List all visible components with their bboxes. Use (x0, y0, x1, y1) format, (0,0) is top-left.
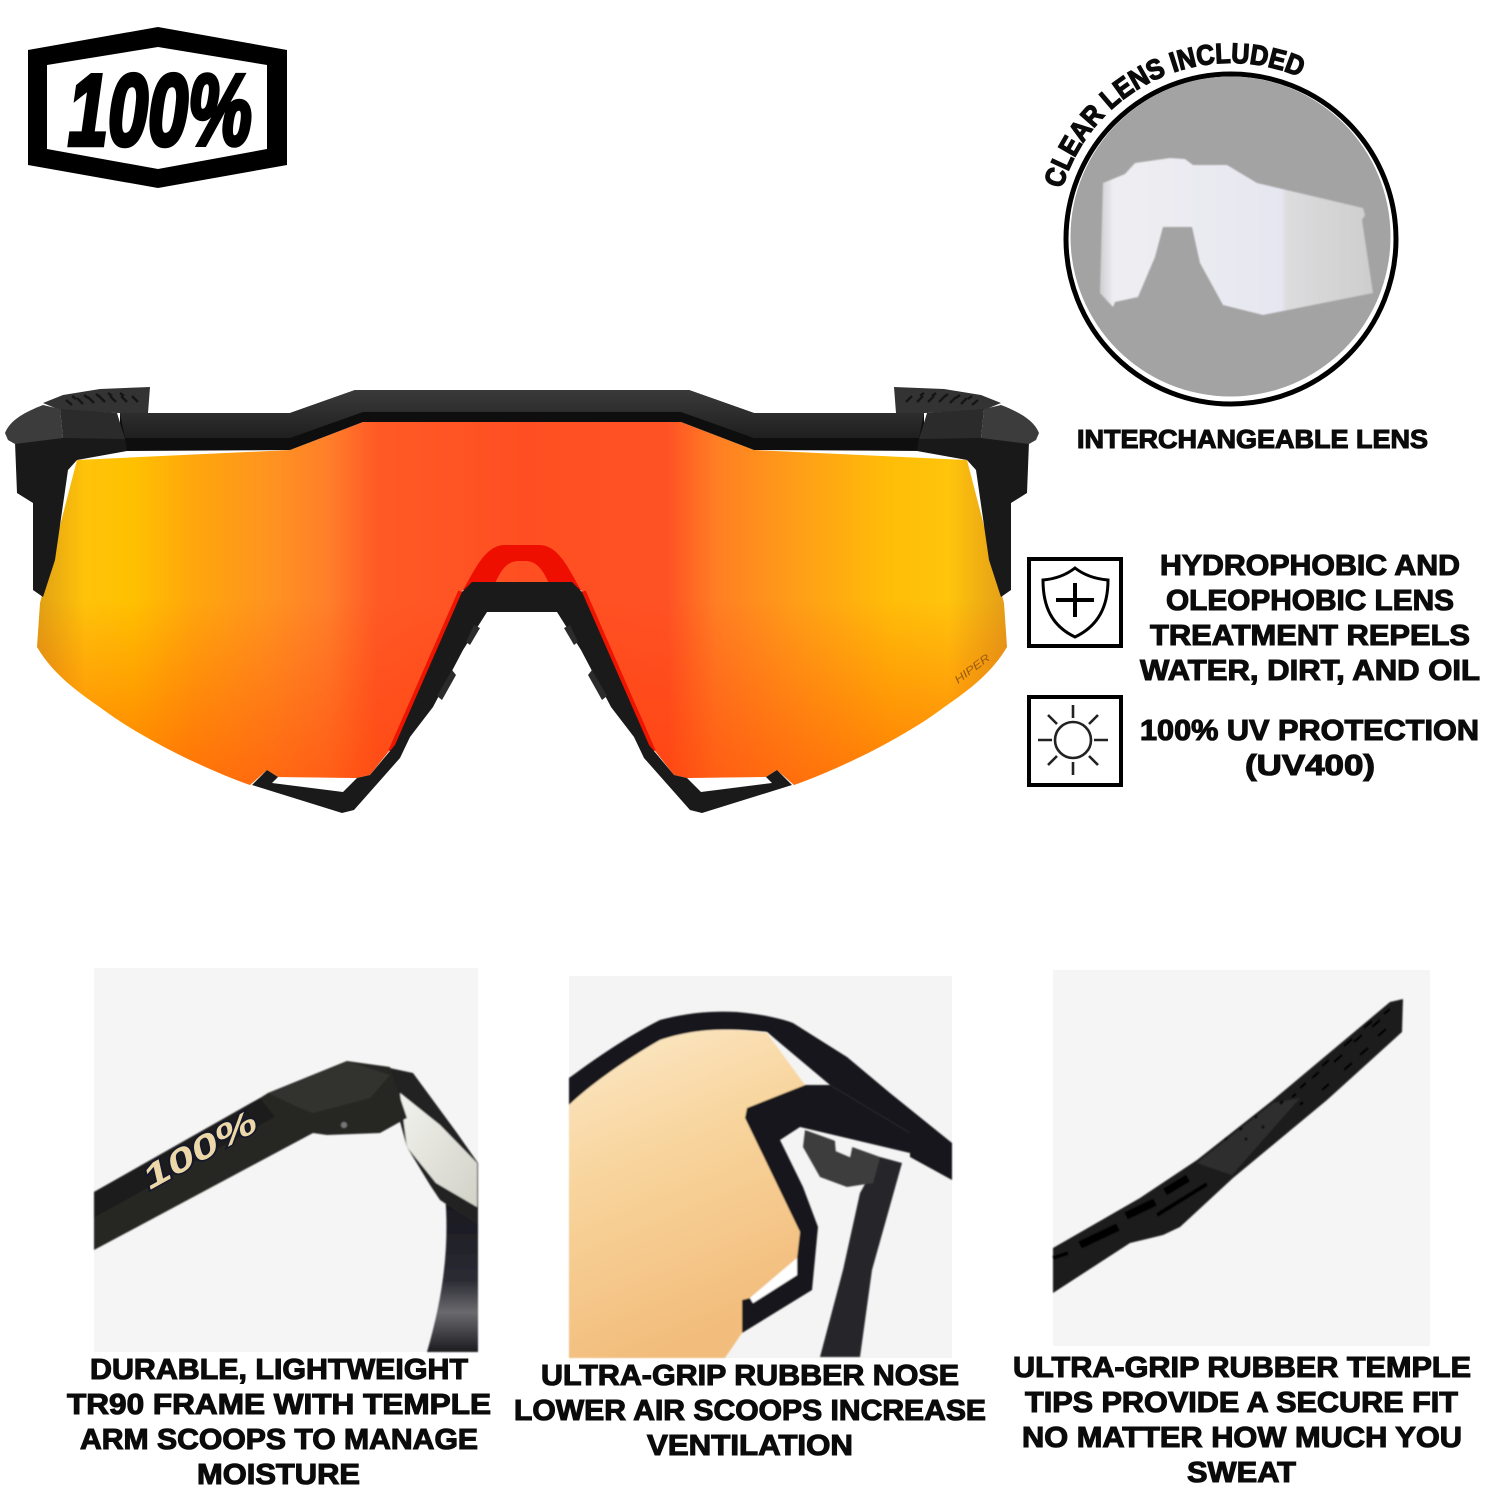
clear lens shape (1100, 158, 1373, 315)
text: lens treatment: TREATMENT REPELS (1150, 620, 1470, 652)
icon: shield with plus (1029, 559, 1121, 646)
temple arm (820, 1157, 902, 1357)
circle: clear lens included: CLEAR LENS INCLUDED (1045, 42, 1304, 186)
caption: nose: LOWER AIR SCOOPS INCREASE (514, 1395, 986, 1427)
caption: temple tips: SWEAT (1187, 1457, 1296, 1489)
logo on arm: 100% (135, 1103, 264, 1196)
frame: top bar and temples (5, 387, 1039, 597)
temple tip (1053, 999, 1403, 1293)
caption: nose: ULTRA-GRIP RUBBER NOSE (541, 1360, 959, 1392)
frame: nose piece and lower scoops (252, 582, 792, 813)
lens mark: HIPER: HIPER (953, 652, 993, 686)
text: lens treatment (1140, 550, 1480, 687)
frame nose strip (742, 1085, 910, 1333)
text: UV protection: 100% UV PROTECTION (1140, 715, 1479, 747)
text: lens treatment: WATER, DIRT, AND OIL (1140, 655, 1480, 687)
upper temple dark band (385, 1067, 478, 1225)
lower scoop (750, 1258, 797, 1303)
logo: 100% badge (28, 27, 287, 188)
frame top (569, 1012, 952, 1180)
arm (94, 1061, 407, 1250)
slots (1053, 1178, 1207, 1258)
grip plate (1197, 1098, 1300, 1175)
caption: temple tips (1013, 1352, 1471, 1489)
caption: frame (67, 1354, 491, 1491)
photo panel: temple tip closeup (1053, 970, 1430, 1346)
caption: frame: DURABLE, LIGHTWEIGHT (90, 1354, 468, 1386)
lens: mirrored orange (37, 422, 1007, 785)
caption: frame: ARM SCOOPS TO MANAGE (80, 1424, 478, 1456)
curved label (1062, 63, 1300, 189)
caption: nose (514, 1360, 986, 1462)
gold lens (569, 1030, 805, 1358)
caption: temple tips: TIPS PROVIDE A SECURE FIT (1025, 1387, 1458, 1419)
caption: frame: TR90 FRAME WITH TEMPLE (67, 1389, 491, 1421)
text: UV protection (1140, 715, 1479, 782)
texture: hex grip (1225, 1009, 1390, 1140)
logo: 100% badge: 100% (68, 55, 252, 167)
nose rubber pads (437, 625, 607, 700)
caption: interchangeable lens: INTERCHANGEABLE LENS (1077, 424, 1428, 454)
lens arc (427, 1193, 478, 1352)
caption: temple tips: NO MATTER HOW MUCH YOU (1022, 1422, 1462, 1454)
text: UV protection: (UV400) (1245, 750, 1375, 782)
caption: frame: MOISTURE (197, 1459, 360, 1491)
circle: clear lens included (1045, 42, 1398, 406)
light temple band (400, 1093, 477, 1207)
nose arch: red lens edge (392, 545, 652, 752)
text: lens treatment: HYDROPHOBIC AND (1160, 550, 1460, 582)
sunglasses: main product image (5, 387, 1039, 813)
text: lens treatment: OLEOPHOBIC LENS (1166, 585, 1454, 617)
photo panel: nose piece closeup (569, 976, 952, 1358)
icon: sun (1029, 697, 1121, 785)
rubber grip (803, 1130, 880, 1187)
photo panel: temple arm with logo (94, 968, 478, 1352)
caption: temple tips: ULTRA-GRIP RUBBER TEMPLE (1013, 1352, 1471, 1384)
caption: nose: VENTILATION (647, 1430, 853, 1462)
